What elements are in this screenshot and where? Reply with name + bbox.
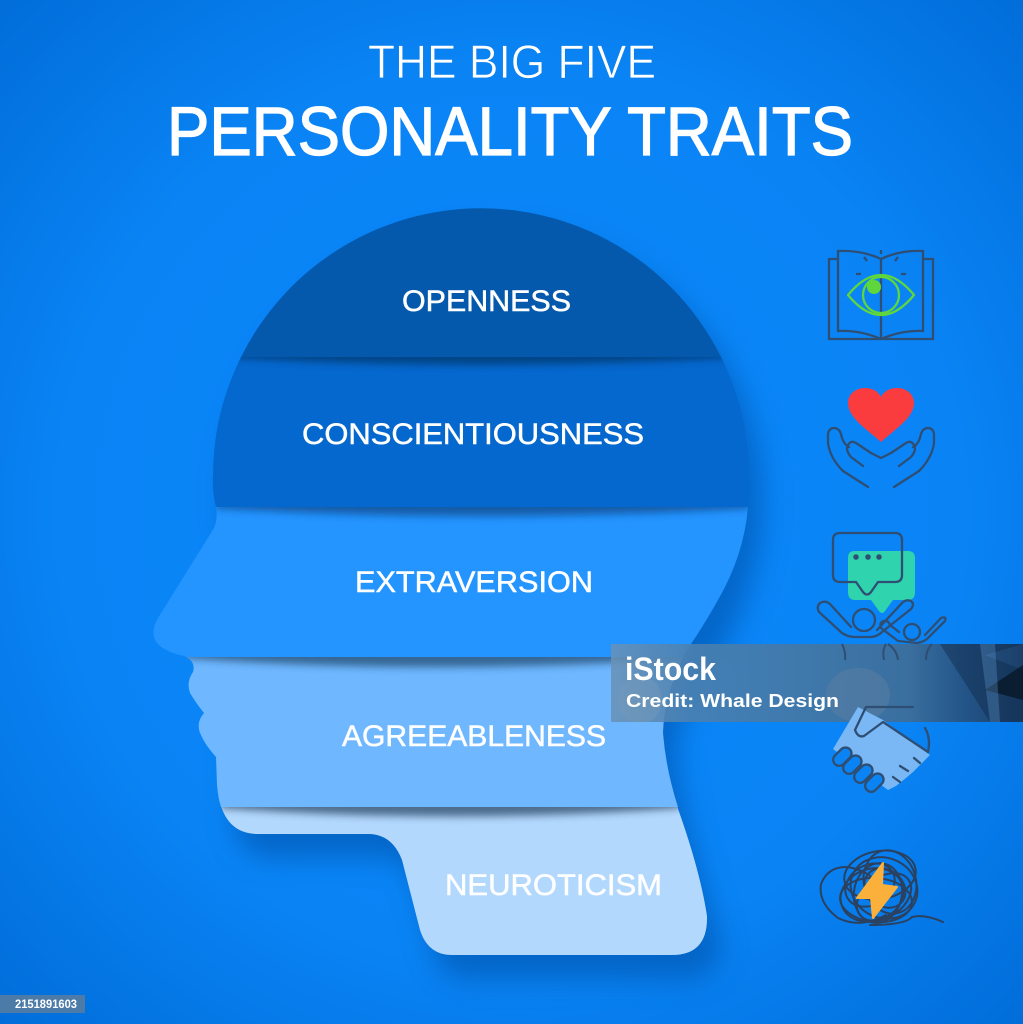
title line: the big five: THE BIG FIVE (368, 35, 656, 88)
layer: openness (241, 208, 721, 357)
image id tag: 2151891603 (15, 999, 77, 1011)
label: conscientiousness: CONSCIENTIOUSNESS (302, 418, 644, 451)
label: openness: OPENNESS (402, 285, 571, 318)
layer: conscientiousness (213, 348, 749, 507)
icon: speech bubbles and people (818, 533, 946, 643)
icon: tangled scribble with lightning (821, 844, 943, 931)
layer: agreeableness (185, 648, 690, 807)
image id tag (0, 995, 85, 1013)
watermark: istock: iStock (625, 651, 716, 687)
layer: extraversion (153, 498, 750, 657)
icon: book with eye (829, 250, 933, 339)
label: extraversion: EXTRAVERSION (355, 566, 593, 599)
layer: neuroticism (221, 798, 707, 955)
label: agreeableness: AGREEABLENESS (342, 720, 606, 753)
title line: personality traits: PERSONALITY TRAITS (167, 93, 853, 170)
icon: heart in hands (828, 388, 934, 487)
label: neuroticism: NEUROTICISM (445, 869, 662, 902)
title (167, 35, 853, 170)
blurred people legs behind the band (842, 644, 932, 660)
layered head (153, 208, 750, 955)
head silhouette shadow (227, 231, 763, 979)
icon: handshake (831, 707, 930, 794)
watermark: credit: Credit: Whale Design (626, 691, 839, 711)
watermark band (611, 644, 1023, 724)
